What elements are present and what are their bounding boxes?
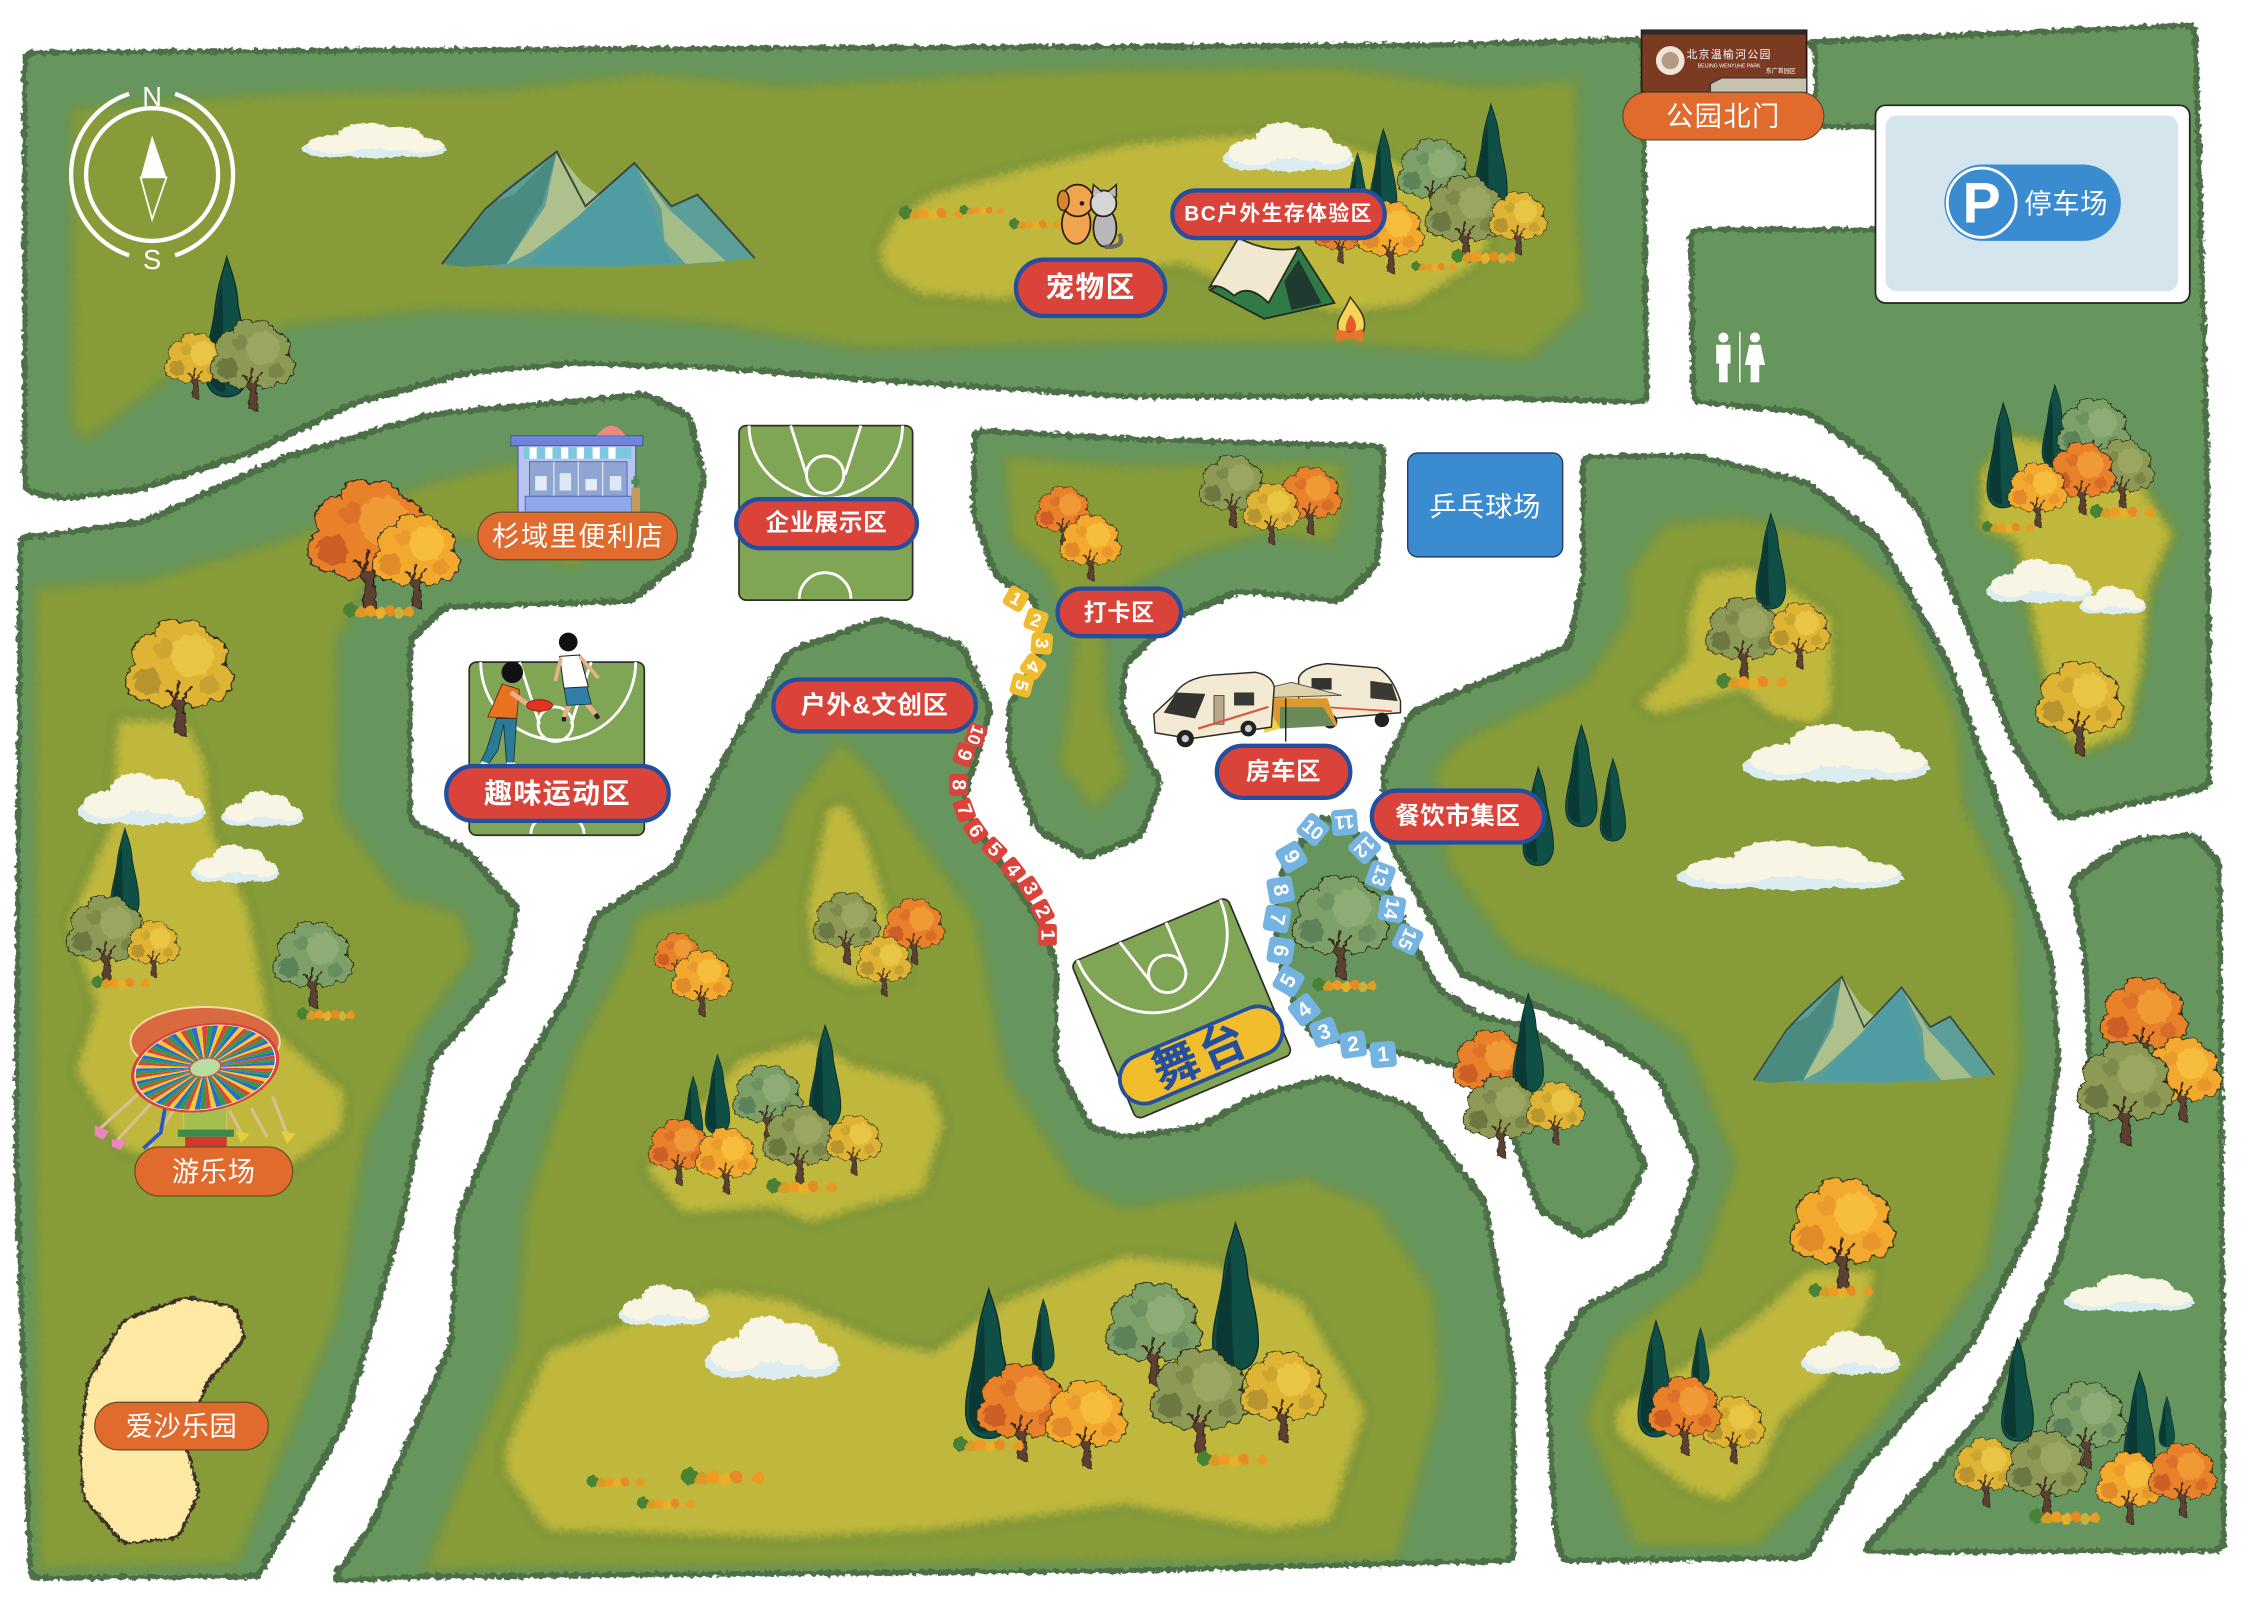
tree: east yellow xyxy=(1791,1179,1894,1298)
number chain: red 1-10: 8 xyxy=(948,779,970,790)
number chain: red 1-10 xyxy=(948,721,1058,946)
label: fun sports: 趣味运动区 xyxy=(484,778,631,809)
yellow clearing: north xyxy=(1634,564,1835,729)
table tennis court: 乒乓球场 xyxy=(1429,491,1541,522)
label: sand park xyxy=(95,1402,268,1450)
trees: north-west cluster xyxy=(165,257,294,410)
olive lawn xyxy=(34,462,603,1570)
awning tent xyxy=(1248,682,1342,742)
olive lawn xyxy=(1004,456,1347,811)
number chain: red 1-10: 3 xyxy=(1018,878,1043,899)
trees: south-east lower xyxy=(1954,1338,2216,1524)
panel: north meadow xyxy=(26,40,1646,498)
cloud: north meadow xyxy=(301,123,446,158)
number chain: blue 1-15: 11 xyxy=(1334,811,1355,834)
trees: south-east upper xyxy=(2078,978,2221,1144)
trees: north-east cluster xyxy=(1982,385,2154,533)
player in orange shirt xyxy=(481,661,552,766)
trees: south lawn cluster xyxy=(953,1223,1324,1467)
north gate sign: 东广首园区 xyxy=(1766,67,1796,75)
cloud: south-east xyxy=(1801,1274,2194,1375)
trees: shop side xyxy=(309,481,459,618)
trees: check-in right xyxy=(1200,456,1341,544)
carousel canopy xyxy=(126,1013,285,1122)
number chain: red 1-10: 5 xyxy=(983,838,1006,861)
yellow clearing: north tip xyxy=(804,801,911,990)
parking sign: 停车场 xyxy=(2024,188,2108,219)
olive lawn xyxy=(72,66,1584,441)
convenience store xyxy=(511,426,643,514)
panel: check-in meadow xyxy=(974,431,1383,857)
label: north gate xyxy=(1623,92,1824,140)
player in white shirt xyxy=(555,633,598,721)
label: stage xyxy=(1112,997,1291,1113)
north gate sign: 北京温榆河公园 xyxy=(1686,48,1772,61)
court: exhibition zone xyxy=(739,426,913,600)
label: convenience store: 杉域里便利店 xyxy=(492,520,664,551)
number chain: red 1-10: 7 xyxy=(952,801,976,819)
trees: middle clearing xyxy=(649,1025,881,1194)
yellow clearing xyxy=(875,130,1492,316)
label: exhibition zone xyxy=(736,499,917,548)
table tennis court xyxy=(1408,453,1563,557)
number chain: blue 1-15 xyxy=(1262,808,1425,1069)
number chain: yellow 1-5: 3 xyxy=(1031,638,1052,649)
number chain: blue 1-15: 6 xyxy=(1268,943,1293,958)
number chain: blue 1-15: 2 xyxy=(1346,1032,1360,1057)
trees: east clearing xyxy=(1706,514,1830,689)
number chain: blue 1-15: 12 xyxy=(1350,833,1379,862)
trees: cypress trio xyxy=(1523,725,1626,866)
number chain: blue 1-15: 1 xyxy=(1377,1043,1390,1067)
label: stage: 舞台 xyxy=(1145,1011,1257,1099)
tree: west sage xyxy=(273,922,355,1020)
parking lot xyxy=(1875,105,2190,303)
label: sand park: 爱沙乐园 xyxy=(126,1411,237,1442)
number chain: yellow 1-5: 5 xyxy=(1011,678,1033,693)
tent xyxy=(1210,238,1335,319)
label: check-in zone: 打卡区 xyxy=(1084,599,1155,625)
players: frisbee xyxy=(481,633,598,766)
yellow clearing xyxy=(1979,433,2175,755)
court: fun sports xyxy=(469,662,644,835)
number chain: red 1-10: 6 xyxy=(964,820,988,842)
number chain: blue 1-15: 5 xyxy=(1276,970,1302,992)
mountain: north xyxy=(442,151,755,267)
parking sign xyxy=(1944,164,2121,241)
yellow clearing: south xyxy=(1613,1267,1878,1506)
trees: west hill xyxy=(67,828,179,989)
label: fun sports xyxy=(446,766,669,821)
olive lawn xyxy=(423,740,1441,1570)
number chain: yellow 1-5: 4 xyxy=(1022,657,1044,676)
number chain: blue 1-15: 4 xyxy=(1293,997,1316,1023)
panel: central meadow xyxy=(333,619,1512,1580)
cloud: east meadow xyxy=(1676,724,1930,890)
number chain: yellow 1-5: 2 xyxy=(1028,609,1044,631)
parking sign: P xyxy=(1963,171,2001,235)
label: exhibition zone: 企业展示区 xyxy=(766,510,888,537)
trees: north tip clearing xyxy=(814,893,944,995)
compass: S xyxy=(143,244,161,275)
trees: central left xyxy=(654,933,732,1016)
label: convenience store xyxy=(478,512,677,560)
sand playground xyxy=(79,1296,247,1545)
olive lawn xyxy=(1434,516,2022,1547)
number chain: blue 1-15: 13 xyxy=(1367,862,1394,889)
campfire xyxy=(1336,297,1365,339)
number chain: red 1-10: 10 xyxy=(963,723,988,747)
trees: check-in xyxy=(1036,487,1121,580)
compass xyxy=(71,81,233,275)
number chain: yellow 1-5: 1 xyxy=(1007,588,1025,610)
panel: north-east meadow xyxy=(1692,26,2208,818)
panel: south-east meadow xyxy=(1864,835,2223,1551)
number chain: blue 1-15: 15 xyxy=(1394,925,1422,953)
number chain: blue 1-15: 9 xyxy=(1279,846,1304,868)
number chain: blue 1-15: 8 xyxy=(1268,882,1293,898)
panel: west meadow xyxy=(17,395,703,1577)
yellow clearing: south xyxy=(502,1252,1369,1541)
RV: front xyxy=(1154,672,1274,747)
yellow clearing xyxy=(65,717,349,1171)
number chain: blue 1-15: 3 xyxy=(1315,1019,1334,1045)
label: RV zone: 房车区 xyxy=(1246,757,1321,785)
label: carousel: 游乐场 xyxy=(172,1156,256,1187)
bushes: pet zone xyxy=(899,205,1060,230)
label: outdoor and creative xyxy=(773,679,976,731)
panel: stage island xyxy=(1274,817,1644,1236)
trees: east south xyxy=(1638,1321,1764,1463)
label: RV zone xyxy=(1217,746,1350,798)
number chain: red 1-10: 9 xyxy=(952,746,976,764)
label: check-in zone xyxy=(1058,589,1181,636)
tree: west yellow xyxy=(126,620,232,734)
carousel ride xyxy=(95,1007,296,1150)
number chain: blue 1-15: 7 xyxy=(1265,911,1289,927)
bushes: south lawn xyxy=(587,1468,764,1510)
label: north gate: 公园北门 xyxy=(1666,101,1781,132)
label: pet zone: 宠物区 xyxy=(1045,272,1136,304)
yellow clearing: middle xyxy=(641,1036,947,1226)
number chain: blue 1-15: 10 xyxy=(1298,815,1328,844)
label: carousel xyxy=(135,1147,293,1196)
number chain: yellow 1-5 xyxy=(1001,584,1053,699)
RV: rear xyxy=(1299,664,1401,729)
stage court xyxy=(1070,896,1294,1120)
cloud: north-east pair xyxy=(1986,559,2146,614)
label: food market xyxy=(1372,791,1544,843)
trees: camp cluster xyxy=(1314,104,1547,273)
RV zone vehicles xyxy=(1154,664,1401,747)
label: BC survival zone xyxy=(1172,190,1385,238)
number chain: red 1-10: 1 xyxy=(1037,929,1058,940)
north gate sign xyxy=(1642,30,1807,92)
icon: restrooms xyxy=(1716,332,1765,382)
number chain: red 1-10: 4 xyxy=(1001,859,1025,881)
label: outdoor and creative: 户外&文创区 xyxy=(801,691,949,719)
cloud: south lawn xyxy=(618,1285,840,1379)
label: BC survival zone: BC户外生存体验区 xyxy=(1184,202,1373,226)
tree: north-east yellow xyxy=(2036,662,2122,755)
number chain: red 1-10: 2 xyxy=(1030,902,1055,922)
label: pet zone xyxy=(1016,260,1165,316)
tree: stage island xyxy=(1293,876,1388,992)
label: food market: 餐饮市集区 xyxy=(1395,802,1521,830)
compass: N xyxy=(142,81,162,112)
number chain: blue 1-15: 14 xyxy=(1380,897,1404,922)
cloud: pet zone xyxy=(1223,122,1353,172)
trees: island tail xyxy=(1454,994,1584,1157)
mountain: east xyxy=(1754,977,1994,1083)
pets: dog and cat xyxy=(1058,185,1121,247)
north gate sign: BEIJING WENYUHE PARK xyxy=(1698,63,1761,69)
cloud: west meadow xyxy=(77,773,303,883)
panel: east meadow xyxy=(1383,457,2058,1560)
